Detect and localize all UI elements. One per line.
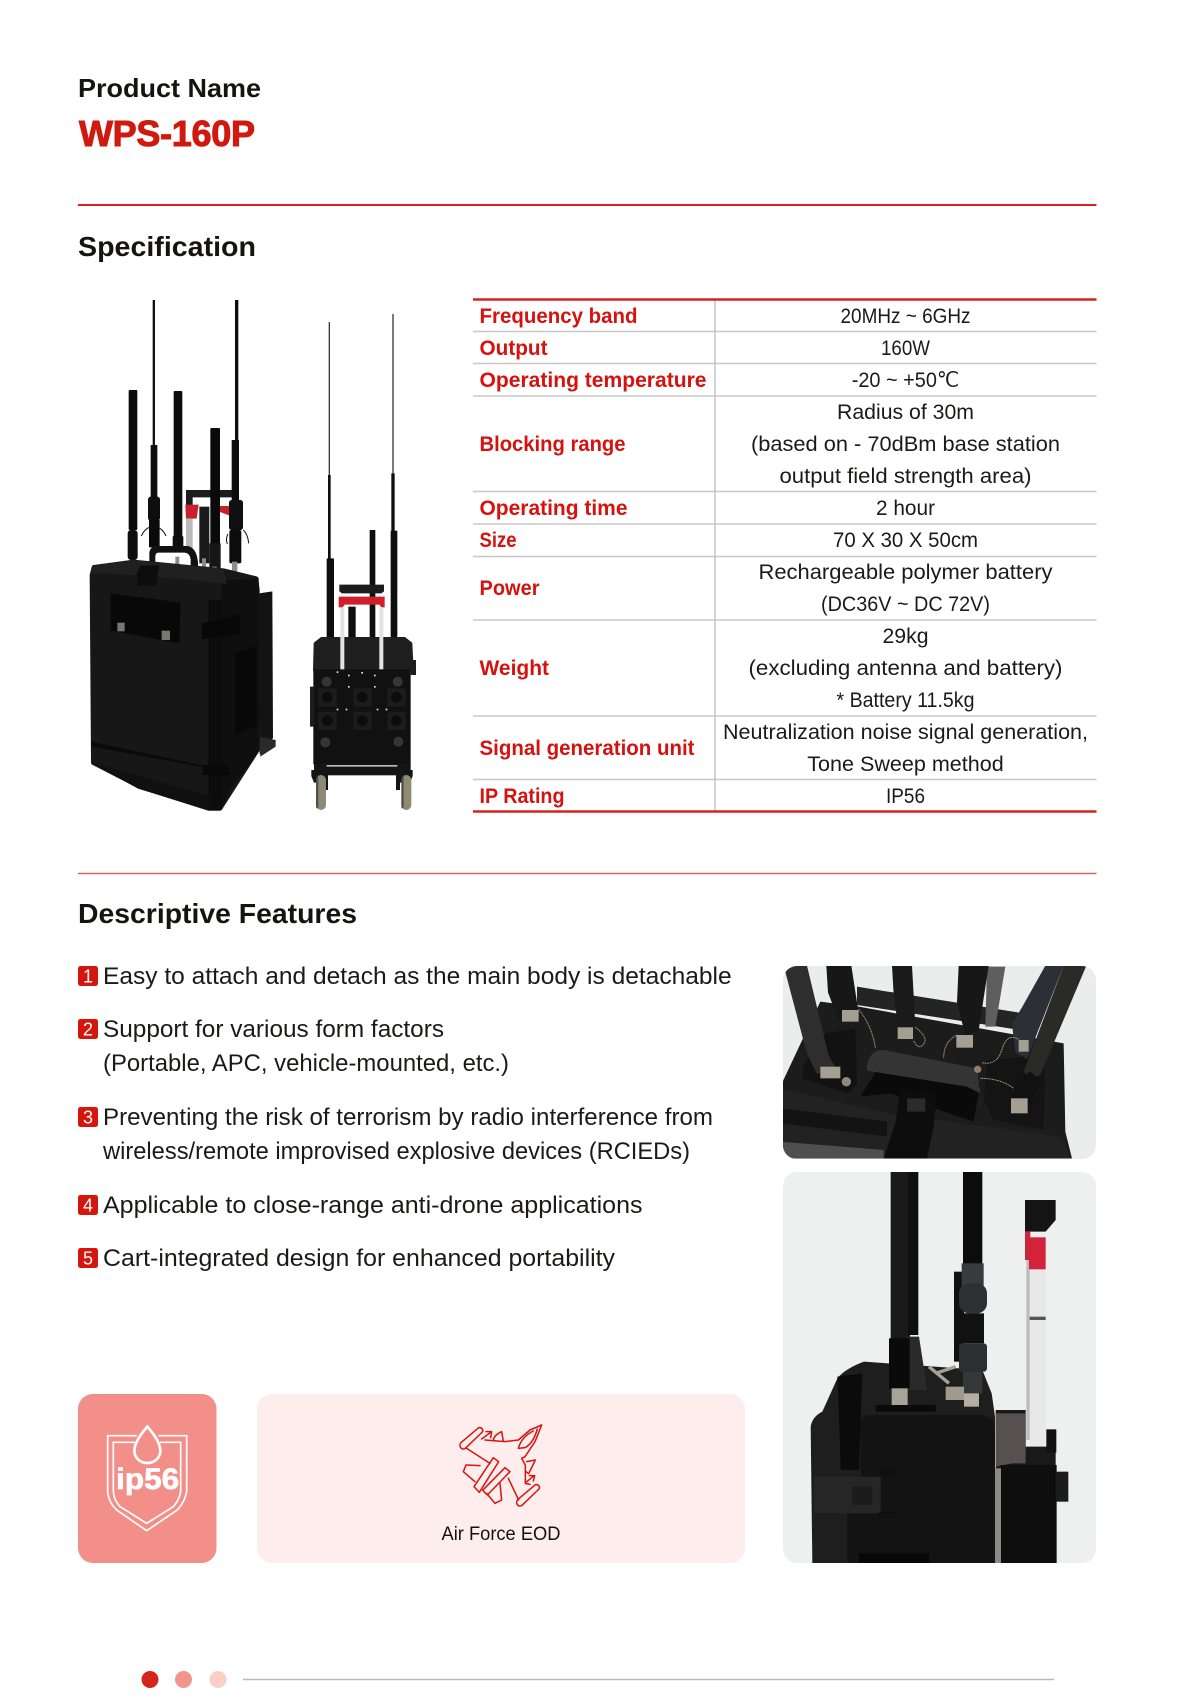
row: operating temperature	[480, 369, 959, 392]
icon: shield with water drop	[108, 1427, 187, 1531]
row: operating time	[480, 497, 935, 520]
row: frequency band	[480, 305, 970, 328]
label: Product Name: Product Name	[78, 73, 261, 103]
row: signal generation unit: Signal generation unit	[480, 737, 695, 760]
row: power: Rechargeable polymer battery	[758, 561, 1053, 584]
feature 3	[78, 1104, 713, 1165]
model name: WPS-160P: WPS-160P	[79, 113, 255, 154]
heading: Descriptive Features: Descriptive Features	[78, 898, 357, 929]
panel: IP56 badge	[78, 1394, 216, 1563]
row: operating time: Operating time	[480, 497, 628, 520]
feature 5: 5	[83, 1248, 93, 1268]
row: output: Output	[480, 337, 548, 360]
left unit: case three-quarter view	[90, 300, 276, 811]
feature 3: Preventing the risk of terrorism by radio interference from	[103, 1104, 713, 1131]
row: signal generation unit: Tone Sweep method	[807, 753, 1004, 776]
row: signal generation unit: Neutralization noise signal generation,	[723, 721, 1088, 744]
row: power: Power	[480, 577, 540, 600]
row: weight: Weight	[480, 657, 549, 680]
row: operating temperature: Operating temperature	[480, 369, 706, 392]
header: product name	[78, 73, 261, 154]
feature 2: (Portable, APC, vehicle-mounted, etc.)	[103, 1050, 509, 1077]
feature 3: wireless/remote improvised explosive devices (RCIEDs)	[102, 1138, 690, 1165]
row: weight	[480, 625, 1062, 712]
feature 5: Cart-integrated design for enhanced portability	[103, 1245, 615, 1272]
feature 3: 3	[83, 1108, 93, 1128]
features list	[78, 963, 732, 1272]
row: blocking range: Radius of 30m	[837, 401, 974, 424]
specification table	[473, 300, 1096, 812]
row: IP rating: IP56	[886, 785, 925, 808]
row: weight: (excluding antenna and battery)	[748, 657, 1062, 680]
row: output: 160W	[881, 337, 930, 360]
table rules	[473, 300, 1096, 811]
row: size: 70 X 30 X 50cm	[833, 529, 978, 552]
row: output	[480, 337, 930, 360]
row: frequency band: Frequency band	[480, 305, 638, 328]
badge text: ip56	[116, 1463, 179, 1496]
icon: fighter jet outline	[460, 1425, 542, 1506]
row: size: Size	[480, 529, 516, 552]
row: signal generation unit	[480, 721, 1088, 776]
feature 2	[78, 1016, 509, 1077]
row: blocking range	[480, 401, 1060, 488]
photo: antenna connectors top view	[780, 966, 1096, 1159]
right unit: rear view with cart	[310, 314, 416, 810]
row: IP rating	[480, 785, 925, 808]
row: operating temperature: -20 ~ +50℃	[852, 369, 959, 392]
feature 2: 2	[83, 1020, 93, 1040]
row: IP rating: IP Rating	[480, 785, 564, 808]
feature 4: 4	[83, 1196, 93, 1216]
caption: Air Force EOD	[442, 1524, 560, 1545]
row: weight: * Battery 11.5kg	[836, 689, 974, 712]
heading: Specification: Specification	[78, 231, 256, 262]
row: power: (DC36V ~ DC 72V)	[821, 593, 990, 616]
row: frequency band: 20MHz ~ 6GHz	[840, 305, 970, 328]
row: weight: 29kg	[882, 625, 928, 648]
footer: pagination dots and line	[142, 1671, 1054, 1688]
row: operating time: 2 hour	[876, 497, 935, 520]
row: blocking range: output field strength area)	[780, 465, 1032, 488]
feature 1: 1	[83, 966, 93, 986]
panel: Air Force EOD	[257, 1394, 745, 1563]
photo: side view of case with trolley	[783, 1172, 1096, 1563]
row: blocking range: (based on - 70dBm base station	[751, 433, 1060, 456]
row: power	[480, 561, 1053, 616]
feature 4: Applicable to close-range anti-drone applications	[103, 1192, 642, 1219]
row: blocking range: Blocking range	[480, 433, 626, 456]
feature 1: Easy to attach and detach as the main body is detachable	[103, 963, 732, 990]
product photo: jammer case with antennas, side and rear views	[90, 300, 416, 811]
feature 2: Support for various form factors	[103, 1016, 444, 1043]
row: size	[480, 529, 978, 552]
